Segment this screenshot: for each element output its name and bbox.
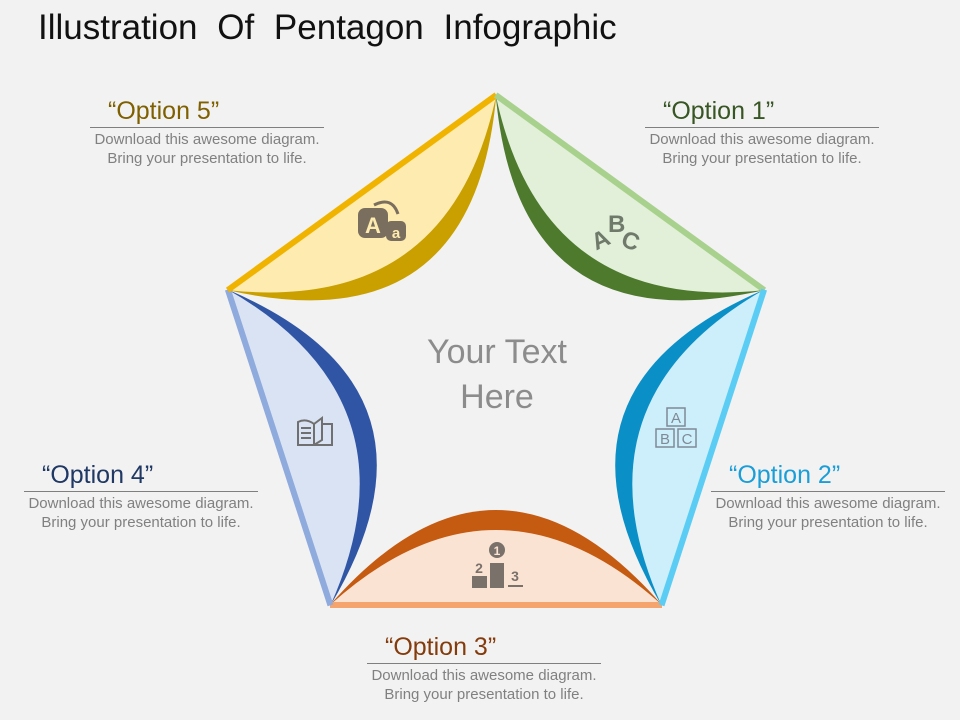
text block: option 3 [367,633,601,703]
icon: blocks ABC [656,408,696,448]
text block: option 3: Download this awesome diagram. [371,667,597,684]
text block: option 5 [90,97,324,167]
icon: ABC letters: A [587,224,614,256]
text block: option 3: Bring your presentation to life. [384,686,584,703]
icon: podium: 3 [511,568,519,584]
text block: option 1: Download this awesome diagram. [649,131,875,148]
center text: Here [460,378,534,416]
icon: ABC letters: B [608,211,625,238]
icon: podium: 1 [494,544,501,558]
text block: option 2 [711,461,945,531]
text block: option 3: “Option 3” [385,633,496,661]
text block: option 1: “Option 1” [663,97,774,125]
text block: option 1: Bring your presentation to life. [662,150,862,167]
icon: blocks ABC: A [671,410,681,427]
text block: option 1 [645,97,879,167]
icon: Aa: A [365,213,381,238]
icon: podium [472,542,523,588]
segment: option 5 [228,95,552,367]
segment: option 3 [330,510,662,605]
icon: book [298,418,332,445]
text block: option 5: Download this awesome diagram. [94,131,320,148]
segment: option 1 [440,95,764,367]
title: Illustration Of Pentagon Infographic [38,8,617,47]
center text: Your Text [427,333,567,371]
text block: option 4: “Option 4” [42,461,153,489]
icon: ABC letters [587,211,643,257]
text block: option 4 [24,461,258,531]
icon: Aa: a [392,225,401,242]
segment: option 4 [228,260,421,605]
text block: option 2: “Option 2” [729,461,840,489]
text block: option 5: Bring your presentation to life. [107,150,307,167]
text block: option 5: “Option 5” [108,97,219,125]
center text [427,333,567,416]
segment: option 2 [571,260,764,605]
text block: option 2: Bring your presentation to life. [728,514,928,531]
icon: podium: 2 [475,560,483,576]
icon: blocks ABC: C [682,431,693,448]
text block: option 2: Download this awesome diagram. [715,495,941,512]
icon: blocks ABC: B [660,431,670,448]
icon: ABC letters: C [618,226,643,257]
text block: option 4: Download this awesome diagram. [28,495,254,512]
icon: Aa [358,202,406,242]
text block: option 4: Bring your presentation to life. [41,514,241,531]
